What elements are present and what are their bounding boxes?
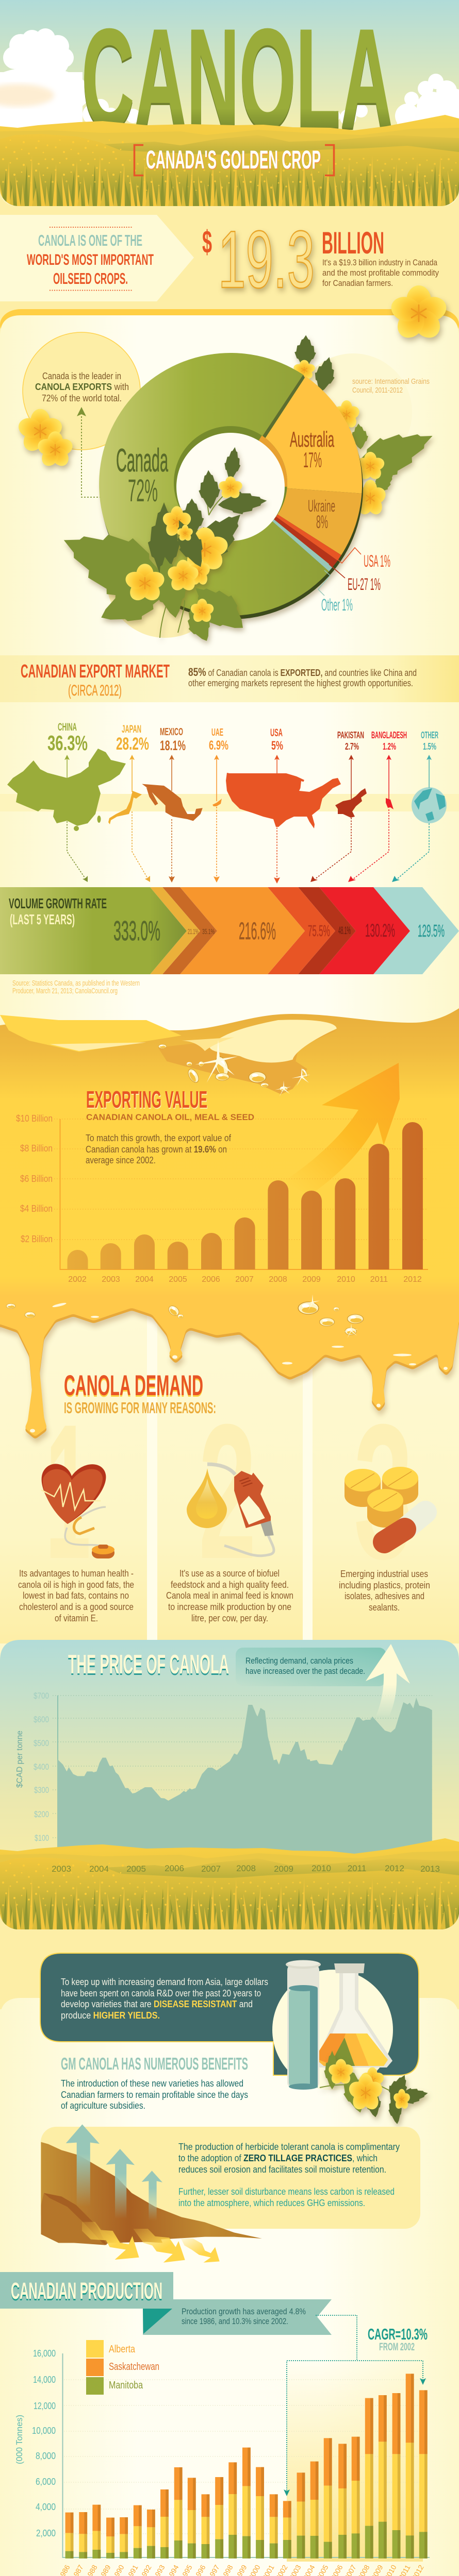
label: USA: USA <box>270 727 283 739</box>
down arrows <box>82 2222 139 2260</box>
hole lip <box>174 426 287 539</box>
year labels: price chart <box>52 1863 440 1874</box>
chevrons: volume growth rate: 75.5% <box>308 922 330 940</box>
segment: EU-27 1% <box>273 516 338 567</box>
year labels: price chart: 2004 <box>89 1864 109 1874</box>
band: Canadian export market heading: CANADIAN EXPORT MARKET <box>21 660 170 682</box>
panel: canola importance <box>0 215 194 301</box>
chevrons: volume growth rate: 333.0% <box>113 916 160 946</box>
text: reason 1: cholesterol and is a good source <box>19 1602 134 1612</box>
map: export destinations <box>7 749 447 831</box>
text: reason 2: It's use as a source of biofuel <box>179 1568 280 1579</box>
heading: canola demand: CANOLA DEMAND <box>64 1370 203 1403</box>
band: Canadian export market heading: 85% of Canadian canola is EXPORTED, and countries like China and <box>188 666 417 679</box>
text: GM canola benefits <box>61 2054 248 2111</box>
axis labels: $300 <box>34 1785 49 1795</box>
chart highlight <box>287 2361 423 2562</box>
year labels: price chart: 2008 <box>236 1863 256 1873</box>
panel: demand columns: 1 <box>45 1384 91 1599</box>
text: GM canola benefits: Canadian farmers to remain profitable since the days <box>61 2090 248 2100</box>
intro section background <box>0 188 459 361</box>
banner: Canadian production: since 1986, and 10.3% since 2002. <box>182 2316 288 2326</box>
year labels <box>68 1275 422 1284</box>
year labels: 2002 <box>68 1275 87 1284</box>
panel: GM canola <box>0 1998 459 2576</box>
Japan <box>108 791 142 824</box>
icon: corner flower <box>388 285 450 343</box>
arrows: CAGR bracket <box>284 2315 426 2496</box>
panel: canola importance: CANOLA IS ONE OF THE <box>38 231 142 249</box>
text: zero tillage: to the adoption of ZERO TILLAGE PRACTICES, which <box>178 2153 378 2163</box>
leader labels for small segments: EU-27 1% <box>348 575 381 594</box>
Pakistan <box>335 788 367 818</box>
legend: provinces <box>86 2340 159 2395</box>
axes <box>63 2353 430 2557</box>
axis <box>60 1119 428 1269</box>
panel: price of canola background <box>0 1640 459 2009</box>
chevrons: volume growth rate: 48.1% <box>338 925 351 937</box>
sky <box>0 0 459 155</box>
banner: Canadian production: CANADIAN PRODUCTION <box>11 2279 162 2306</box>
pie labels: 8% <box>316 512 328 532</box>
pie labels: Australia <box>290 427 334 451</box>
axis labels <box>34 1691 49 1843</box>
heading: the price of canola <box>68 1650 229 1681</box>
label: USA: 5% <box>271 739 283 753</box>
stat: 19.3 billion <box>202 214 439 305</box>
band: Canadian export market heading: (CIRCA 2012) <box>68 682 122 699</box>
callout: research box: develop varieties that are DISEASE RESISTANT and <box>61 1999 253 2009</box>
big number 3: 3 <box>354 1384 413 1599</box>
axis labels: $8 Billion <box>20 1143 53 1154</box>
arrowheads <box>83 876 400 884</box>
Alberta series <box>65 2442 428 2553</box>
canola field <box>0 115 459 206</box>
panel: canola importance: WORLD'S MOST IMPORTANT <box>27 251 154 268</box>
pie labels: 17% <box>303 448 322 472</box>
year labels: 2009 <box>302 1275 321 1284</box>
label: Pakistan: 2.7% <box>345 741 359 752</box>
panel: zero tillage <box>41 2127 420 2229</box>
text: pie source: Council, 2011-2012 <box>352 386 403 395</box>
text: USA 1% <box>364 552 390 570</box>
text: GM canola benefits: The introduction of these new varieties has allowed <box>61 2078 243 2089</box>
text: exporting value: average since 2002. <box>86 1155 156 1165</box>
segment: Canada 72% <box>99 353 329 616</box>
peach cloud glow <box>0 84 54 107</box>
label: Bangladesh: BANGLADESH <box>371 730 407 740</box>
callout: research box: have been spent on canola R&D over the past 20 years to <box>61 1988 261 1998</box>
segment: Ukraine 8% <box>276 488 362 555</box>
pie depth <box>100 357 363 619</box>
text: reason 1: Its advantages to human health - <box>19 1568 134 1579</box>
label: Pakistan <box>337 730 364 801</box>
text: exporting value: Canadian canola has grown at 19.6% on <box>86 1144 227 1155</box>
text: growth source: Source: Statistics Canada, as published in the Western <box>12 979 140 988</box>
chevrons: volume growth rate: (LAST 5 YEARS) <box>10 911 75 927</box>
text: reason 1: canola oil is high in good fats, the <box>18 1580 134 1590</box>
icon: flower sprig near flask <box>320 2050 429 2125</box>
text: reason 3 <box>339 1569 430 1613</box>
label: Mexico: 18.1% <box>160 738 186 753</box>
grid <box>64 2380 428 2534</box>
axis title: $CAD per tonne <box>15 1731 24 1788</box>
axis labels: $600 <box>34 1715 49 1724</box>
year labels: price chart: 2007 <box>201 1864 221 1874</box>
callout: research box: To keep up with increasing demand from Asia, large dollars <box>61 1977 268 1987</box>
pie labels <box>116 427 335 532</box>
text: canada leader callout: Canada is the leader in <box>42 371 121 381</box>
icon: fuel nozzle and oil drop <box>187 1464 274 1556</box>
leaves and flowers behind the pie <box>16 335 441 518</box>
text: canada leader callout <box>35 371 129 403</box>
text: reason 3: sealants. <box>369 1602 400 1613</box>
text: zero tillage: Further, lesser soil disturbance means less carbon is released <box>178 2187 395 2197</box>
year labels: price chart: 2009 <box>274 1864 293 1874</box>
year labels: price chart: 2010 <box>312 1863 331 1873</box>
clouds <box>0 28 459 129</box>
grid lines <box>54 1119 428 1240</box>
arrow: export growth <box>284 1063 400 1195</box>
chevrons: volume growth rate <box>0 887 459 974</box>
y labels: 16,000 <box>33 2348 56 2359</box>
leader labels for small segments <box>318 548 390 614</box>
chart: canola price <box>15 1691 432 1880</box>
year labels: 2003 <box>102 1275 120 1284</box>
heading: canola demand: IS GROWING FOR MANY REASONS: <box>64 1399 216 1417</box>
bars <box>65 2374 428 2558</box>
heading: canola demand: CANOLA DEMAND <box>64 1369 203 1401</box>
text: reason 2: litre, per cow, per day. <box>191 1613 268 1623</box>
y labels: 4,000 <box>36 2502 56 2512</box>
legend: provinces: Manitoba <box>109 2380 143 2391</box>
chart: export value bars <box>16 1113 428 1284</box>
chart: canadian production stacked bars <box>14 2348 430 2576</box>
text: zero tillage: reduces soil erosion and facilitates soil moisture retention. <box>178 2164 386 2175</box>
soil <box>41 2142 262 2245</box>
text: reason 1: lowest in bad fats, contains no <box>23 1590 129 1601</box>
year labels: price chart: 2012 <box>385 1863 404 1873</box>
USA <box>226 773 341 828</box>
text: zero tillage: The production of herbicide tolerant canola is complimentary <box>178 2142 400 2152</box>
oil drip: upper <box>0 1275 459 1443</box>
label: Japan: 28.2% <box>116 734 149 754</box>
chevrons: volume growth rate: 35.1% <box>202 927 215 936</box>
price area <box>58 1698 432 1880</box>
text: reason 2 <box>166 1568 293 1623</box>
text: growth source: Producer, March 21, 2013; CanolaCouncil.org <box>12 987 118 995</box>
text: exporting value: CANADIAN CANOLA OIL, MEAL & SEED <box>86 1112 254 1122</box>
y title: (000 Tonnes) <box>14 2415 24 2464</box>
year labels: 2012 <box>403 1275 422 1284</box>
dashed arrows to growth band <box>67 807 429 879</box>
axis labels: $100 <box>35 1833 49 1843</box>
arrow: rising price <box>366 1644 410 1716</box>
y labels: 10,000 <box>32 2426 56 2436</box>
country labels and arrows <box>47 721 438 801</box>
up arrows <box>66 2124 100 2207</box>
icon: test tube and flask <box>286 1960 392 2090</box>
y labels: 12,000 <box>34 2401 56 2411</box>
axis labels: $500 <box>34 1738 49 1748</box>
text: exporting value: EXPORTING VALUE <box>86 1086 207 1113</box>
axis labels <box>16 1113 53 1244</box>
callout: research box <box>40 1953 419 2090</box>
label: Other: 1.5% <box>423 741 436 752</box>
band: Canadian export market heading <box>0 655 459 702</box>
flask <box>316 1971 392 2067</box>
pie labels: 72% <box>128 473 158 508</box>
text: price note: Reflecting demand, canola prices <box>245 1656 353 1666</box>
icon: heart and stethoscope <box>41 1464 114 1558</box>
year labels: 2006 <box>202 1275 220 1284</box>
stat: 19.3 billion: 19.3 <box>218 214 315 305</box>
segment: Australia 17% <box>260 375 362 494</box>
axis labels: $200 <box>34 1809 49 1819</box>
axis labels: $10 Billion <box>16 1113 53 1124</box>
text: canada leader callout: 72% of the world total. <box>42 393 122 403</box>
axis labels: $4 Billion <box>20 1204 53 1214</box>
panel: export share <box>0 309 459 655</box>
label: UAE: UAE <box>211 727 223 738</box>
bars <box>67 1122 423 1269</box>
Saskatchewan series <box>65 2374 428 2536</box>
stat: 19.3 billion: for Canadian farmers. <box>322 278 393 288</box>
icon: pills and capsule <box>345 1467 425 1542</box>
arrow: callout connector <box>77 407 101 497</box>
year labels: 2004 <box>135 1275 154 1284</box>
label: China <box>47 721 88 778</box>
hero: sky, clouds, title and canola field <box>0 0 459 206</box>
year labels: price chart: 2003 <box>52 1864 71 1874</box>
text: reason 2: Canola meal in animal feed is known <box>166 1590 293 1601</box>
pie edge between Canada and Australia <box>260 375 305 440</box>
panel: canola importance: OILSEED CROPS. <box>53 269 128 287</box>
heading: the price of canola: THE PRICE OF CANOLA <box>68 1651 229 1681</box>
axis labels: $6 Billion <box>20 1174 53 1184</box>
text: price note: have increased over the past decade. <box>245 1666 365 1676</box>
illustration: soil with arrows <box>41 2124 262 2263</box>
text: reason 3: isolates, adhesives and <box>345 1591 424 1601</box>
text: canada leader callout: CANOLA EXPORTS with <box>35 382 129 392</box>
stat: 19.3 billion: BILLION <box>322 226 384 260</box>
pie labels: Canada <box>116 443 168 479</box>
text: reason 2: to increase milk production by one <box>168 1602 291 1612</box>
callout: CAGR <box>368 2325 428 2353</box>
hole <box>176 433 285 541</box>
Bangladesh <box>386 798 394 809</box>
band: Canadian export market heading: other emerging markets represent the highest growth opportunities. <box>188 678 413 688</box>
sparkles <box>195 1040 238 1083</box>
axis labels: $2 Billion <box>21 1234 53 1244</box>
label: Other: OTHER <box>421 730 438 740</box>
text: reason 1: of vitamin E. <box>55 1613 98 1623</box>
callout: CAGR: FROM 2002 <box>379 2341 415 2353</box>
callout: price note box <box>236 1648 386 1686</box>
text: pie source: source: International Grains <box>352 377 430 386</box>
callout circles <box>23 332 412 638</box>
banner: Canadian production: Production growth has averaged 4.8% <box>182 2307 306 2316</box>
China <box>7 749 126 831</box>
grid <box>53 1696 432 1838</box>
axis labels: $400 <box>34 1762 49 1772</box>
y labels <box>32 2348 56 2538</box>
text: exporting value <box>86 1086 254 1165</box>
panel: demand columns <box>0 1288 459 1643</box>
flower cluster on donut bottom <box>51 499 254 646</box>
year labels: price chart: 2005 <box>126 1864 146 1874</box>
label: Bangladesh <box>371 730 407 799</box>
axis <box>57 1696 58 1860</box>
year labels: 2008 <box>269 1275 287 1284</box>
label: Bangladesh: 1.2% <box>383 741 396 752</box>
year labels: 2010 <box>337 1275 355 1284</box>
Manitoba series <box>65 2522 428 2558</box>
segment: USA 1% <box>274 514 341 561</box>
oil swirls and droplets <box>0 1015 337 1097</box>
oil droplets <box>6 1303 15 1309</box>
banner: Canadian production <box>0 2272 332 2335</box>
subtitle with brackets <box>134 145 334 175</box>
heading: the price of canola: THE PRICE OF CANOLA <box>68 1650 229 1680</box>
leader labels for small segments: Other 1% <box>321 596 353 614</box>
text: reason 1 <box>18 1568 134 1623</box>
stat: 19.3 billion: and the most profitable commodity <box>322 268 439 278</box>
drip highlights <box>30 1302 448 1432</box>
chevrons: volume growth rate: VOLUME GROWTH RATE <box>9 895 107 911</box>
text: GM canola benefits: of agriculture subsidies. <box>61 2100 145 2111</box>
banner: Canadian production: CANADIAN PRODUCTION <box>11 2278 162 2304</box>
year labels: 2007 <box>235 1275 254 1284</box>
test tube <box>287 1964 319 2089</box>
oil wash <box>0 1008 459 1283</box>
droplets <box>186 1067 201 1084</box>
y labels: 6,000 <box>36 2477 56 2487</box>
chevrons: volume growth rate: 216.6% <box>239 917 276 944</box>
big number 2: 2 <box>199 1384 256 1599</box>
label: China: 36.3% <box>47 731 88 755</box>
text: reason 3: including plastics, protein <box>339 1580 430 1590</box>
label: China: CHINA <box>58 721 77 733</box>
label: Other <box>421 730 438 788</box>
year labels <box>56 2563 425 2576</box>
flower sprig inside donut <box>198 446 268 516</box>
heading: canola demand <box>64 1369 216 1417</box>
text: pie source <box>352 377 430 395</box>
Mexico <box>142 784 203 821</box>
label: Japan <box>116 723 149 792</box>
legend: provinces: Alberta <box>109 2344 136 2355</box>
label: Mexico: MEXICO <box>160 726 183 738</box>
year labels: price chart: 2011 <box>348 1863 366 1873</box>
text: exporting value: To match this growth, the export value of <box>86 1133 232 1143</box>
year labels: 2005 <box>169 1275 187 1284</box>
y labels: 8,000 <box>36 2451 56 2461</box>
swirls <box>0 1015 337 1094</box>
text: exporting value: EXPORTING VALUE <box>87 1087 208 1114</box>
bar side shading <box>71 2374 428 2558</box>
label: Pakistan: PAKISTAN <box>337 730 364 740</box>
text: zero tillage: into the atmosphere, which reduces GHG emissions. <box>178 2198 365 2208</box>
label: Japan: JAPAN <box>122 723 141 735</box>
axis labels: $700 <box>34 1691 49 1701</box>
year labels: price chart: 2013 <box>420 1864 440 1874</box>
y labels: 2,000 <box>36 2528 56 2538</box>
map band <box>0 794 459 811</box>
callout: research box: produce HIGHER YIELDS. <box>61 2010 160 2021</box>
label: UAE <box>209 727 228 801</box>
text: reason 2: feedstock and a high quality feed. <box>171 1580 289 1590</box>
text: price note <box>245 1656 365 1676</box>
year labels: price chart: 2006 <box>165 1863 184 1873</box>
segment: Other 1% <box>271 518 333 571</box>
label: Mexico <box>160 726 186 791</box>
text: growth source <box>12 979 140 995</box>
chevrons: volume growth rate: 130.2% <box>365 921 395 941</box>
text: reason 3: Emerging industrial uses <box>340 1569 428 1579</box>
year labels: 2011 <box>370 1275 388 1284</box>
globe <box>412 787 447 823</box>
UAE <box>212 799 222 806</box>
label: USA <box>270 727 283 773</box>
text: Ukraine <box>308 497 335 515</box>
text: zero tillage <box>178 2142 400 2208</box>
field below price chart <box>0 1838 459 1929</box>
chart: export share donut <box>99 353 363 619</box>
stat: 19.3 billion: $ <box>202 225 212 260</box>
chevrons: volume growth rate: 21.1% <box>188 927 199 936</box>
text: GM canola benefits: GM CANOLA HAS NUMEROUS BENEFITS <box>61 2054 248 2073</box>
label: UAE: 6.9% <box>209 738 228 753</box>
legend: provinces: Saskatchewan <box>109 2361 159 2372</box>
y labels: 14,000 <box>33 2375 56 2385</box>
